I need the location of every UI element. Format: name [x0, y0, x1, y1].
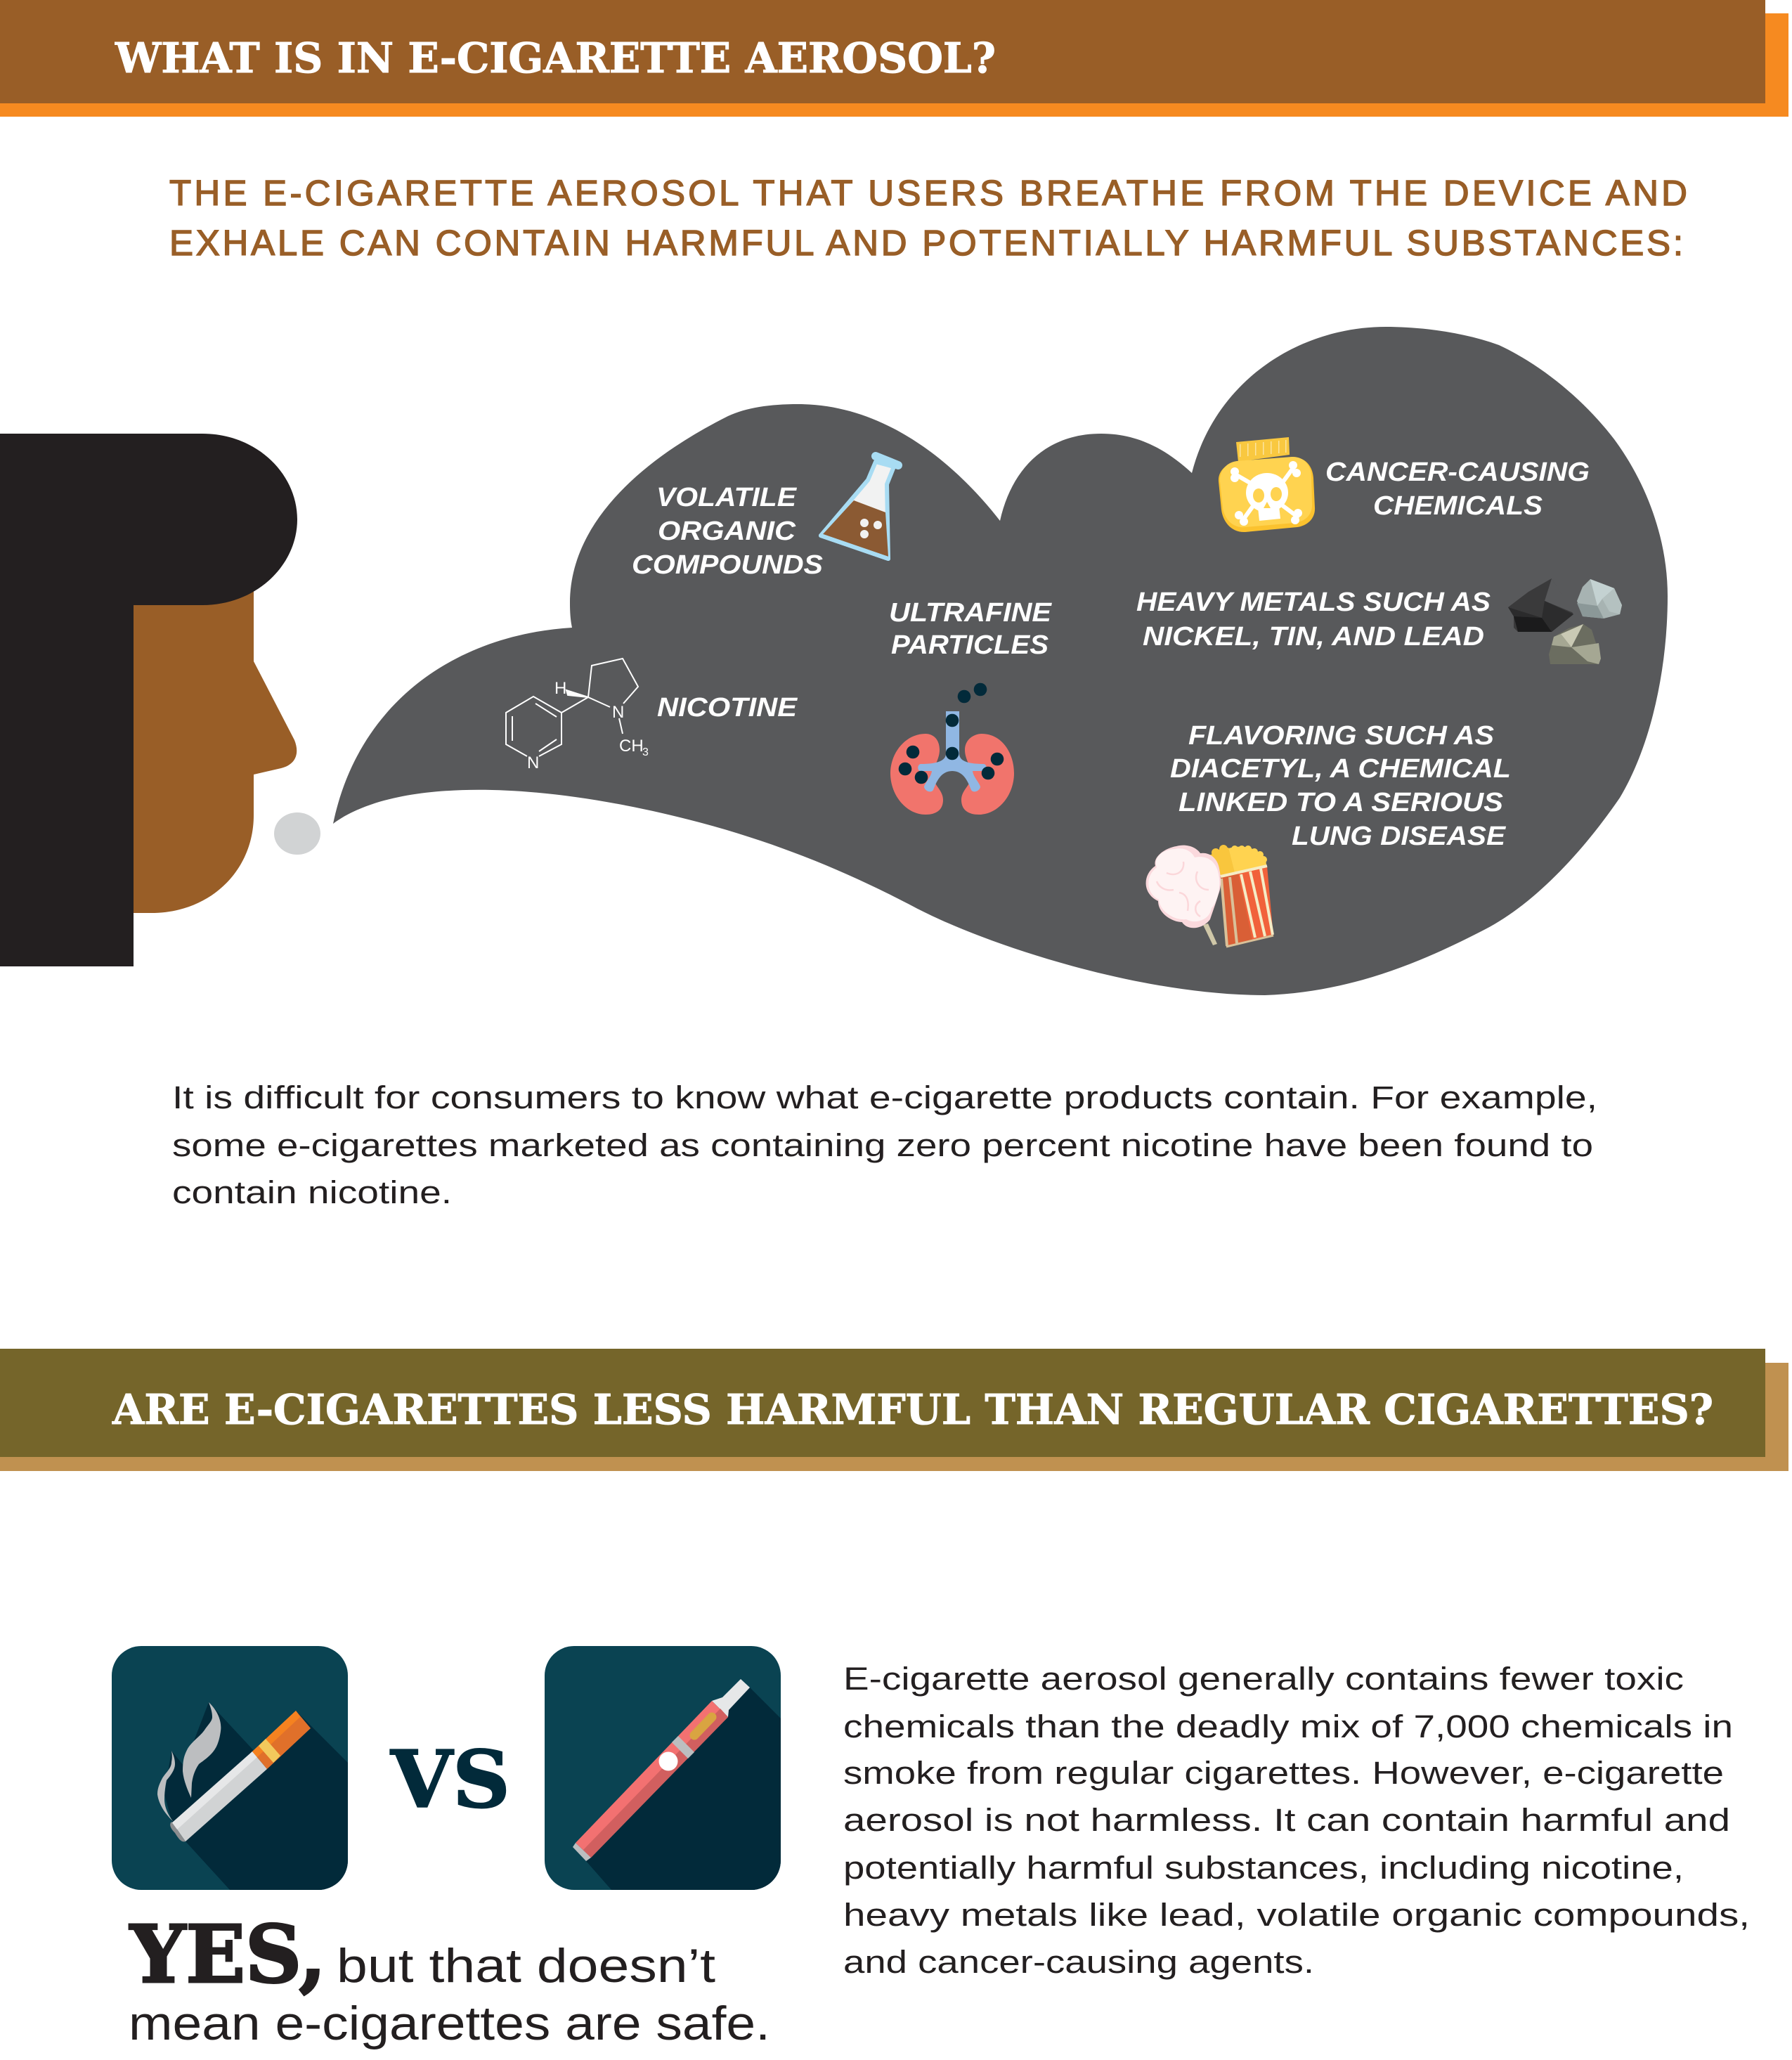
callout: yes, but that doesn't mean e-cigarettes are safe: mean e-cigarettes are safe. [129, 1997, 770, 2050]
header band: what is in e-cigarette aerosol [0, 0, 1788, 117]
icon: nicotine molecule [506, 659, 649, 772]
paragraph: fewer toxic chemicals but not harmless: E-cigarette aerosol generally contains fewer toxic [843, 1661, 1684, 1697]
label: heavy metals [1136, 588, 1491, 652]
vs label: VS [390, 1735, 510, 1826]
icon: nicotine molecule: 3 [642, 746, 649, 758]
aerosol cloud panel [333, 327, 1668, 995]
callout: yes, but that doesn't mean e-cigarettes are safe: YES, [129, 1909, 326, 2001]
icon: nicotine molecule: CH [619, 737, 644, 756]
label: ultrafine particles: PARTICLES [891, 630, 1048, 660]
label: volatile organic compounds: VOLATILE [656, 483, 798, 512]
paragraph: fewer toxic chemicals but not harmless [843, 1661, 1750, 1980]
label: volatile organic compounds [632, 483, 823, 580]
label: ultrafine particles: ULTRAFINE [889, 598, 1053, 628]
heading: section one: WHAT IS IN E-CIGARETTE AEROSOL? [115, 34, 996, 82]
small exhaled puff [274, 812, 320, 855]
label: flavoring: LINKED TO A SERIOUS [1179, 788, 1503, 817]
icon: e-cigarette tile [545, 1646, 781, 1891]
label: volatile organic compounds: ORGANIC [658, 517, 796, 546]
callout: yes, but that doesn't mean e-cigarettes are safe [129, 1909, 770, 2050]
paragraph: fewer toxic chemicals but not harmless: aerosol is not harmless. It can contain harmful and [843, 1802, 1730, 1838]
paragraph: fewer toxic chemicals but not harmless: potentially harmful substances, including nicotine, [843, 1850, 1684, 1886]
label: ultrafine particles [889, 598, 1053, 660]
label: flavoring [1170, 721, 1511, 851]
icon: nicotine molecule: N [612, 703, 624, 722]
icon: metal rocks [1508, 578, 1622, 664]
paragraph: difficult to know contents: It is difficult for consumers to know what e-cigarette products contain. For example, [172, 1080, 1597, 1115]
illustration: head in profile [0, 434, 297, 966]
smoke wisps [157, 1702, 221, 1822]
icon: lungs with particles [890, 683, 1014, 815]
subheading: harmful substances statement [169, 173, 1687, 263]
icon: poison bottle with skull [1219, 437, 1315, 532]
label: volatile organic compounds: COMPOUNDS [632, 550, 823, 580]
e-cigarette device [573, 1679, 750, 1861]
label: flavoring: DIACETYL, A CHEMICAL [1170, 754, 1511, 784]
subheading: harmful substances statement: EXHALE CAN CONTAIN HARMFUL AND POTENTIALLY HARMFUL SUBSTANCES: [169, 223, 1683, 263]
paragraph: fewer toxic chemicals but not harmless: and cancer-causing agents. [843, 1944, 1314, 1980]
label: flavoring: LUNG DISEASE [1292, 822, 1507, 851]
icon: cigarette tile [112, 1646, 348, 1891]
callout: yes, but that doesn't mean e-cigarettes are safe: but that doesn’t [337, 1939, 715, 1993]
paragraph: difficult to know contents: some e-cigarettes marketed as containing zero percent nicotine have been found to [172, 1127, 1593, 1163]
paragraph: difficult to know contents: contain nicotine. [172, 1174, 452, 1210]
icon: flask [821, 456, 898, 559]
label: cancer-causing chemicals: CANCER-CAUSING [1325, 458, 1590, 487]
subheading: harmful substances statement: THE E-CIGARETTE AEROSOL THAT USERS BREATHE FROM THE DEVICE AND [169, 173, 1687, 213]
cigarette [170, 1711, 311, 1841]
label: heavy metals: HEAVY METALS SUCH AS [1136, 588, 1491, 617]
label: cancer-causing chemicals [1325, 458, 1590, 521]
icon: popcorn and cotton candy [1146, 845, 1273, 947]
label: nicotine: NICOTINE [657, 693, 798, 723]
heading: section two: ARE E-CIGARETTES LESS HARMFUL THAN REGULAR CIGARETTES? [112, 1385, 1713, 1434]
icon: nicotine molecule: N [527, 753, 539, 772]
label: heavy metals: NICKEL, TIN, AND LEAD [1143, 622, 1484, 652]
paragraph: fewer toxic chemicals but not harmless: chemicals than the deadly mix of 7,000 chemicals in [843, 1709, 1733, 1744]
paragraph: difficult to know contents [172, 1080, 1597, 1210]
label: flavoring: FLAVORING SUCH AS [1188, 721, 1494, 751]
header band: are e-cigarettes less harmful [0, 1349, 1788, 1471]
paragraph: fewer toxic chemicals but not harmless: smoke from regular cigarettes. However, e-cigarette [843, 1755, 1724, 1791]
icon: nicotine molecule: H [554, 679, 566, 698]
label: cancer-causing chemicals: CHEMICALS [1373, 491, 1543, 521]
paragraph: fewer toxic chemicals but not harmless: heavy metals like lead, volatile organic compounds, [843, 1897, 1750, 1933]
